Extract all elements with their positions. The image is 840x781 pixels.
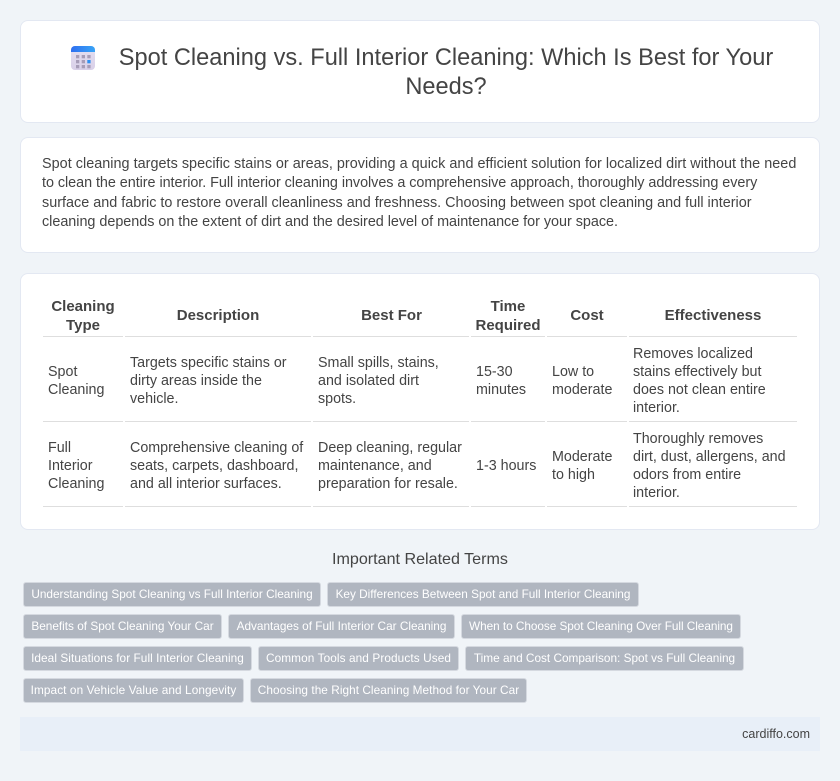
row: spot cleaning: spots. (318, 391, 356, 407)
row: full interior cleaning: 1-3 hours (476, 458, 536, 474)
table header: Best For (361, 307, 422, 324)
row: spot cleaning: vehicle. (130, 391, 178, 407)
table header: Description (177, 307, 259, 324)
intro text: surface and fabric to restore overall cleanliness and freshness. Choosing between spot cleaning and full interior (42, 195, 752, 211)
row: spot cleaning: and isolated dirt (318, 373, 419, 389)
related terms tags: Impact on Vehicle Value and Longevity (31, 683, 236, 697)
related terms tags: Benefits of Spot Cleaning Your Car (31, 619, 214, 633)
row: full interior cleaning: Cleaning (48, 476, 104, 492)
related terms heading: Important Related Terms (332, 550, 508, 568)
row: spot cleaning: Cleaning (48, 382, 104, 398)
related terms tags (23, 582, 744, 703)
footer source: cardiffo.com (742, 727, 810, 741)
row: full interior cleaning: dirt, dust, allergens, and (633, 449, 786, 465)
related terms tags: Common Tools and Products Used (266, 651, 451, 665)
table header: Type (66, 317, 100, 334)
related terms tags: When to Choose Spot Cleaning Over Full Cleaning (469, 619, 733, 633)
row: spot cleaning: minutes (476, 382, 526, 398)
row: full interior cleaning: odors from entire (633, 467, 741, 483)
row: full interior cleaning: seats, carpets, dashboard, (130, 458, 298, 474)
related terms tags: Key Differences Between Spot and Full Interior Cleaning (336, 587, 630, 601)
table header (51, 298, 761, 334)
intro text: cleaning depends on the extent of dirt and the desired level of maintenance for your space. (42, 214, 618, 230)
intro text (42, 156, 796, 230)
table header: Required (475, 317, 540, 334)
row: full interior cleaning: Comprehensive cleaning of (130, 440, 303, 456)
table card (20, 273, 820, 530)
row: full interior cleaning (48, 431, 786, 501)
row: spot cleaning (48, 346, 766, 416)
related terms tags: Advantages of Full Interior Car Cleaning (237, 619, 446, 633)
row: spot cleaning: Small spills, stains, (318, 355, 439, 371)
row: full interior cleaning: interior. (633, 485, 680, 501)
row: full interior cleaning: Full (48, 440, 71, 456)
related terms tags: Ideal Situations for Full Interior Cleaning (31, 651, 244, 665)
related terms tags: Choosing the Right Cleaning Method for Your Car (258, 683, 519, 697)
header card (20, 20, 820, 123)
row: spot cleaning: Spot (48, 364, 77, 380)
row: full interior cleaning: and all interior surfaces. (130, 476, 282, 492)
intro text: Spot cleaning targets specific stains or areas, providing a quick and efficient solution for localized dirt without the need (42, 156, 796, 172)
table header: Cost (570, 307, 604, 324)
row: spot cleaning: 15-30 (476, 364, 513, 380)
row: full interior cleaning: preparation for resale. (318, 476, 458, 492)
row: full interior cleaning: Moderate (552, 449, 612, 465)
table header: Time (491, 298, 525, 315)
title: Spot Cleaning vs. Full Interior Cleaning: Which Is Best for Your Needs? (119, 45, 773, 100)
row: full interior cleaning: maintenance, and (318, 458, 432, 474)
related terms tags: Understanding Spot Cleaning vs Full Interior Cleaning (31, 587, 313, 601)
row: spot cleaning: does not clean entire (633, 382, 766, 398)
row: spot cleaning: moderate (552, 382, 612, 398)
row: full interior cleaning: to high (552, 467, 595, 483)
row: spot cleaning: Low to (552, 364, 594, 380)
intro card (20, 137, 820, 253)
row: spot cleaning: Targets specific stains or (130, 355, 287, 371)
row: full interior cleaning: Deep cleaning, regular (318, 440, 462, 456)
related terms tags: Time and Cost Comparison: Spot vs Full Cleaning (474, 651, 735, 665)
row: spot cleaning: dirty areas inside the (130, 373, 262, 389)
row: spot cleaning: stains effectively but (633, 364, 761, 380)
footer (20, 717, 820, 751)
row: spot cleaning: Removes localized (633, 346, 753, 362)
table header: Effectiveness (665, 307, 761, 324)
table header: Cleaning (51, 298, 115, 315)
row: full interior cleaning: Thoroughly removes (633, 431, 763, 447)
icon: calendar (71, 46, 95, 70)
row: spot cleaning: interior. (633, 400, 680, 416)
row: full interior cleaning: Interior (48, 458, 92, 474)
intro text: to clean the entire interior. Full interior cleaning involves a comprehensive approach, thoroughly addressing every (42, 175, 757, 191)
